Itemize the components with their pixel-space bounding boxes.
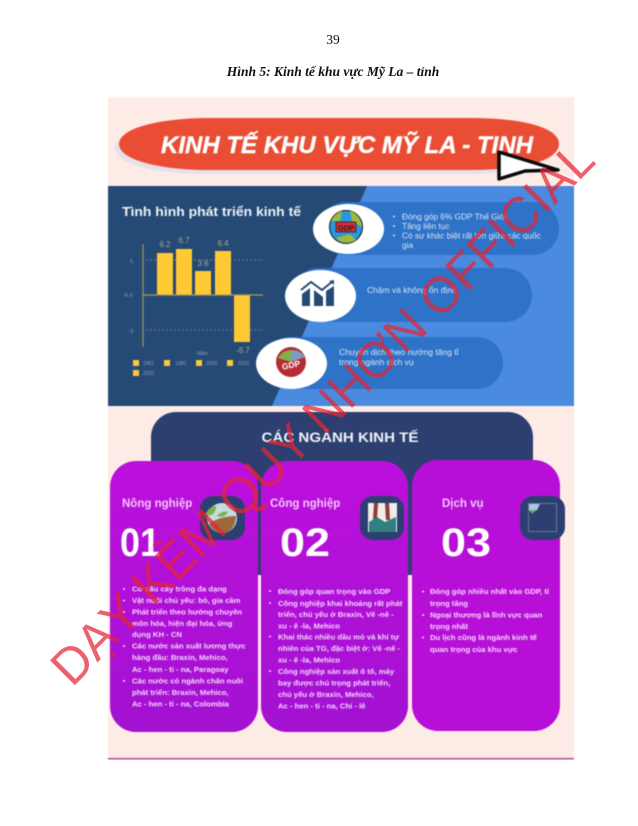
text: industry bullets: xu - ê -la, Mehico [278, 656, 340, 664]
text: agriculture bullets [123, 584, 246, 708]
text: industry bullets: Đóng góp quan trọng vào GDP [278, 587, 390, 596]
text: agriculture bullets: Ac - hen - ti - na, Colombia [132, 700, 230, 708]
chart legend: 1980 [175, 361, 186, 367]
text: industry bullets: xu - ê -la, Mehico [278, 622, 340, 630]
pill: GDP share [313, 202, 559, 255]
watermark: DẠY KÈM QUY NHƠN OFFICIAL [39, 130, 605, 696]
icon: farm [200, 496, 245, 540]
text: services bullets: quan trọng của khu vực [430, 645, 518, 654]
text: agriculture bullets: Cơ cấu cây trồng đa dạng [132, 584, 227, 594]
panel: economic development [108, 186, 574, 406]
card: services: Dịch vụ [442, 498, 484, 510]
chart legend: 2020 [143, 371, 154, 377]
pill: shift to services: trọng ngành dịch vụ [339, 357, 414, 367]
text: agriculture bullets: Các nước sản xuất lương thực [132, 642, 246, 650]
text: services bullets: Ngoại thương là lĩnh vực quan [430, 610, 543, 620]
text: industry bullets: bay được chú trọng phát triển, [278, 678, 390, 688]
text: agriculture bullets: Các nước có ngành chăn nuôi [132, 676, 243, 686]
text: industry bullets: triển, chủ yếu ở Braxin, Vê -nê - [278, 610, 394, 619]
text: agriculture bullets: Vật nuôi chủ yếu: bò, gia cầm [132, 596, 241, 605]
pill: shift to services [256, 337, 503, 389]
text: industry bullets: Công nghiệp sản xuất ô tô, máy [278, 667, 395, 676]
icon: growth chart [301, 280, 334, 306]
card: agriculture: Nông nghiệp [122, 498, 192, 510]
heading: economic development: Tình hình phát triển kinh tế [122, 205, 301, 219]
bar chart: 6.2 [159, 240, 171, 249]
icon: factory [360, 496, 404, 540]
text: industry bullets: nhiên của TG, đặc biệt ở: Vê -nê - [278, 644, 401, 653]
card: industry: Công nghiệp [270, 498, 340, 510]
card: industry [261, 461, 408, 732]
bar chart: Năm [197, 351, 208, 357]
title banner: KINH TẾ KHU VỰC MỸ LA - TINH [161, 131, 534, 159]
text: services bullets [422, 587, 549, 654]
bar chart: % 0 [124, 293, 133, 299]
heading: economic sectors: CÁC NGÀNH KINH TẾ [262, 429, 418, 445]
card: services: 03 [441, 521, 491, 565]
text: services bullets: trọng nhất [430, 622, 468, 631]
icon: cursor arrow [499, 152, 558, 179]
pill: GDP share: Đóng góp 6% GDP Thế Giới [402, 212, 507, 222]
text: industry bullets: Công nghiệp khai khoáng rất phát [278, 599, 403, 608]
bar chart: 3.6 [197, 259, 209, 268]
icon: GDP globe [330, 210, 362, 244]
text: agriculture bullets: Ac - hen - ti - na, Paragoay [132, 665, 229, 674]
figure caption: Hình 5: Kinh tế khu vực Mỹ La – tỉnh [226, 64, 439, 79]
icon: GDP globe: GDP [338, 224, 354, 232]
bar chart: 6.4 [217, 239, 229, 248]
text: industry bullets: Ac - hen - ti - na, Chi - lê [278, 702, 366, 710]
text: industry bullets: Khai thác nhiều dầu mỏ và khí tự [278, 632, 399, 642]
card: industry: 02 [280, 521, 330, 565]
title banner [115, 118, 559, 174]
text: industry bullets [269, 587, 403, 710]
pill: slow growth [285, 268, 532, 322]
text: services bullets: trọng tăng [430, 599, 468, 608]
text: agriculture bullets: dụng KH - CN [132, 630, 182, 639]
chart legend [133, 360, 249, 377]
chart legend: 2010 [238, 361, 249, 367]
page number: 39 [326, 32, 340, 47]
pill: GDP share: Có sự khác biệt rất lớn giữa các quốc [402, 230, 541, 240]
pill: GDP share: Tăng liên tục [402, 221, 450, 231]
infographic background [108, 97, 574, 759]
bar chart: 6.7 [178, 236, 190, 245]
bar chart: -6.7 [236, 346, 250, 355]
text: services bullets: Đóng góp nhiều nhất vào GDP, tỉ [430, 587, 549, 596]
text: agriculture bullets: phát triển: Braxin, Mehico, [132, 688, 229, 697]
chart legend: 2000 [206, 361, 217, 367]
pill: shift to services: Chuyển dịch theo hướng tăng tỉ [339, 347, 459, 357]
bar chart: -5 [129, 329, 134, 335]
icon: broken image [520, 496, 565, 540]
pill: GDP share: gia [402, 240, 413, 250]
text: agriculture bullets: môn hóa, hiện đại hóa, ứng [132, 619, 233, 628]
card: agriculture: 01 [120, 521, 160, 565]
card: services [412, 460, 565, 731]
text: services bullets: Du lịch cũng là ngành kinh tế [430, 633, 538, 642]
card: agriculture [110, 461, 258, 732]
panel: economic sectors [151, 412, 533, 575]
text: industry bullets: chủ yếu ở Braxin, Mehico, [278, 690, 374, 699]
icon: GDP pie: GDP [281, 358, 301, 372]
chart legend: 1961 [143, 361, 154, 367]
bottom border line [108, 758, 574, 760]
pill: slow growth: Chậm và không ổn định [367, 285, 457, 295]
text: agriculture bullets: hàng đầu: Braxin, Mehico, [132, 653, 228, 662]
infographic [108, 97, 574, 760]
bar chart: 5 [130, 259, 133, 265]
bar chart [124, 236, 263, 377]
text: agriculture bullets: Phát triển theo hướng chuyên [132, 608, 242, 616]
icon: GDP pie [276, 347, 306, 377]
